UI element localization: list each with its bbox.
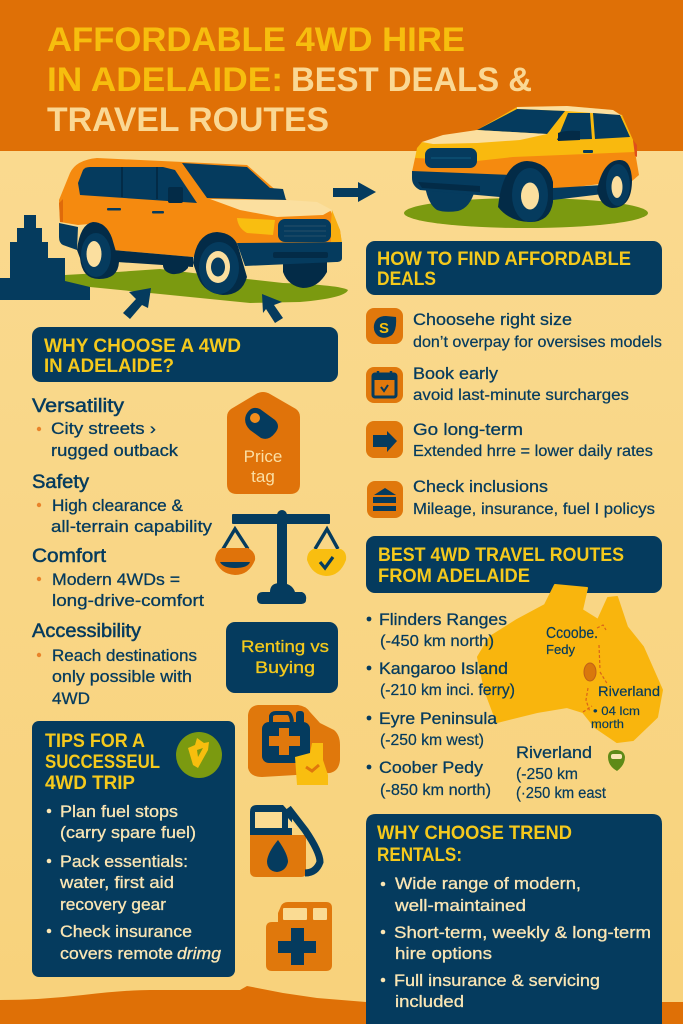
panel: how to find affordable deals heading: DEALS	[377, 269, 436, 290]
text block: why choose list: Safety	[32, 472, 90, 493]
icon: orange 4WD (left)	[59, 158, 342, 295]
title	[47, 21, 532, 139]
map of Australia: Riverland	[598, 683, 660, 699]
text block: why choose list: City streets ›	[51, 419, 156, 438]
list item: book early: avoid last-minute surcharges	[413, 387, 629, 404]
text block: why choose list: Comfort	[32, 546, 107, 567]
icon: arrow	[366, 421, 403, 458]
list item: book early: Book early	[413, 364, 499, 383]
list item: choose the right size: don’t overpay for oversises models	[413, 334, 662, 351]
text block: route list: (-250 km west)	[380, 732, 484, 749]
front wheel	[193, 232, 247, 295]
rear bumper	[59, 223, 78, 250]
rear wheel	[597, 160, 632, 208]
text block: why choose list: rugged outback	[51, 441, 179, 460]
panel: why choose trend rentals: hire options	[395, 944, 492, 963]
icon: price tag: Price	[244, 447, 282, 466]
text block: riverland	[516, 743, 607, 802]
icon: balance scale	[215, 510, 346, 604]
map of Australia	[478, 585, 662, 742]
list item: check inclusions: Check inclusions	[413, 477, 548, 496]
side windows	[78, 167, 197, 203]
panel: tips for a successful trip: (carry spare fuel)	[60, 823, 196, 842]
icon: yellow 4WD (right)	[412, 106, 639, 222]
city skyline silhouette	[0, 215, 90, 300]
text block: why choose list: High clearance &	[52, 496, 184, 515]
windshield	[477, 109, 565, 134]
panel: why choose trend rentals: included	[395, 992, 464, 1011]
rear wheel	[77, 222, 119, 279]
panel: tips for a successful trip: water, first aid	[59, 873, 174, 892]
roof	[517, 106, 622, 116]
hood	[422, 130, 547, 144]
windshield	[182, 163, 286, 200]
icon: green badge with map	[176, 732, 222, 778]
footer outback hill	[0, 986, 683, 1024]
grille	[425, 148, 477, 168]
panel: best 4WD travel routes heading	[366, 536, 662, 593]
text block: why choose list: all-terrain capability	[51, 517, 213, 536]
front bumper	[412, 171, 512, 197]
callout: renting vs buying	[226, 622, 338, 693]
callout: renting vs buying: Renting vs	[241, 637, 329, 656]
title: IN ADELAIDE:	[47, 61, 283, 99]
icon: stacked layers	[367, 481, 403, 518]
panel: tips for a successful trip: recovery gear	[60, 895, 166, 914]
panel: why choose trend rentals: Short-term, weekly & long-term	[394, 923, 651, 942]
list item: book early	[366, 364, 629, 404]
panel: tips for a successful trip: TIPS FOR A	[45, 731, 145, 752]
panel: why choose trend rentals	[366, 814, 662, 1024]
panel: why choose trend rentals: RENTALS:	[377, 845, 462, 866]
text block: why choose list: Reach destinations	[52, 646, 197, 665]
icon: green map pin	[608, 750, 625, 771]
panel: best 4WD travel routes heading: BEST 4WD TRAVEL ROUTES	[378, 545, 624, 566]
tail light	[633, 140, 637, 157]
text block: route list: (-450 km north)	[380, 633, 494, 650]
sill	[553, 185, 603, 200]
icon: fuel pump	[250, 805, 320, 877]
title: AFFORDABLE 4WD HIRE	[47, 21, 465, 59]
icon: calendar	[366, 367, 403, 403]
list item: go long-term: Extended hrre = lower daily rates	[413, 443, 653, 460]
icon: price tag: tag	[251, 467, 275, 486]
text block: route list: Kangaroo Island	[379, 659, 508, 678]
list item: check inclusions	[367, 477, 655, 518]
panel: tips for a successful trip: Check insurance	[60, 922, 192, 941]
text block: why choose list: Versatility	[32, 396, 125, 417]
panel: why choose trend rentals: Full insurance & servicing	[394, 971, 600, 990]
icon: price tag	[227, 392, 300, 494]
panel: tips for a successful trip: covers remote	[60, 944, 173, 963]
ground under left car	[65, 269, 348, 303]
front wheel far side	[283, 262, 327, 288]
headlight	[237, 218, 275, 235]
text block: route list: Coober Pedy	[379, 758, 484, 777]
text block: why choose list: only possible with	[52, 667, 192, 686]
icon: coin badge	[366, 308, 403, 344]
text block: route list: (-850 km north)	[380, 782, 491, 799]
panel: why choose a 4WD heading	[32, 327, 338, 382]
panel: tips for a successful trip	[32, 721, 235, 977]
side skirt	[113, 250, 193, 267]
title: BEST DEALS &	[291, 61, 532, 99]
panel: why choose trend rentals: Wide range of modern,	[395, 874, 581, 893]
front wheel far side	[425, 186, 475, 212]
map of Australia: • 04 lcm	[593, 704, 640, 718]
side windows	[557, 113, 592, 140]
panel: tips for a successful trip: Plan fuel stops	[60, 802, 178, 821]
text block: riverland: (-250 km	[516, 766, 578, 783]
yellow upper body	[415, 107, 635, 161]
map of Australia: morth	[591, 717, 624, 731]
text block: route list: Eyre Peninsula	[379, 709, 498, 728]
header band	[0, 0, 683, 151]
text block: why choose list: 4WD	[52, 689, 90, 708]
panel: how to find affordable deals heading	[366, 241, 662, 295]
icon: jerry can and checklist	[248, 705, 340, 785]
text block: riverland: (·250 km east	[516, 785, 607, 802]
panel: tips for a successful trip: 4WD TRIP	[45, 773, 135, 794]
panel: best 4WD travel routes heading: FROM ADELAIDE	[378, 566, 530, 587]
text block: why choose list: long-drive-comfort	[52, 591, 204, 610]
text block: route list: (-210 km inci. ferry)	[380, 682, 515, 699]
list item: go long-term	[366, 420, 653, 460]
title: TRAVEL ROUTES	[47, 101, 329, 139]
callout: renting vs buying: Buying	[255, 658, 315, 677]
list item: go long-term: Go long-term	[413, 420, 523, 439]
map of Australia: Fedy	[546, 642, 575, 657]
text block: route list: Flinders Ranges	[379, 610, 507, 629]
panel: tips for a successful trip: SUCCESSEUL	[45, 752, 160, 773]
map of Australia: Ccoobe.	[546, 625, 598, 642]
ground under right car	[404, 198, 648, 228]
panel: how to find affordable deals heading: HOW TO FIND AFFORDABLE	[377, 249, 631, 270]
panel: why choose a 4WD heading: IN ADELAIDE?	[44, 356, 174, 377]
panel: tips for a successful trip: drimg	[177, 944, 222, 963]
panel: why choose trend rentals: WHY CHOOSE TREND	[377, 823, 572, 844]
text block: riverland: Riverland	[516, 743, 592, 762]
text block: why choose list: Modern 4WDs =	[52, 570, 180, 589]
panel: why choose a 4WD heading: WHY CHOOSE A 4WD	[44, 336, 241, 357]
icon: first aid kit	[266, 902, 332, 971]
arrow: pointing up-right	[123, 288, 151, 319]
text block: why choose list	[32, 396, 213, 708]
front bumper	[237, 242, 342, 266]
grille	[278, 219, 331, 242]
arrow: pointing up-left	[262, 294, 283, 323]
list item: check inclusions: Mileage, insurance, fuel I policys	[413, 501, 655, 518]
hood	[210, 199, 332, 217]
panel: tips for a successful trip: Pack essentials:	[60, 852, 188, 871]
panel: why choose trend rentals: well-maintained	[394, 896, 526, 915]
text block: why choose list: Accessibility	[32, 621, 142, 642]
list item: choose the right size	[366, 308, 662, 351]
list item: choose the right size: Choosehe right size	[413, 310, 572, 329]
text block: route list	[367, 610, 515, 799]
front wheel	[498, 161, 553, 222]
arrow: pointing right	[333, 182, 376, 202]
icon: coin badge: S	[379, 320, 389, 337]
